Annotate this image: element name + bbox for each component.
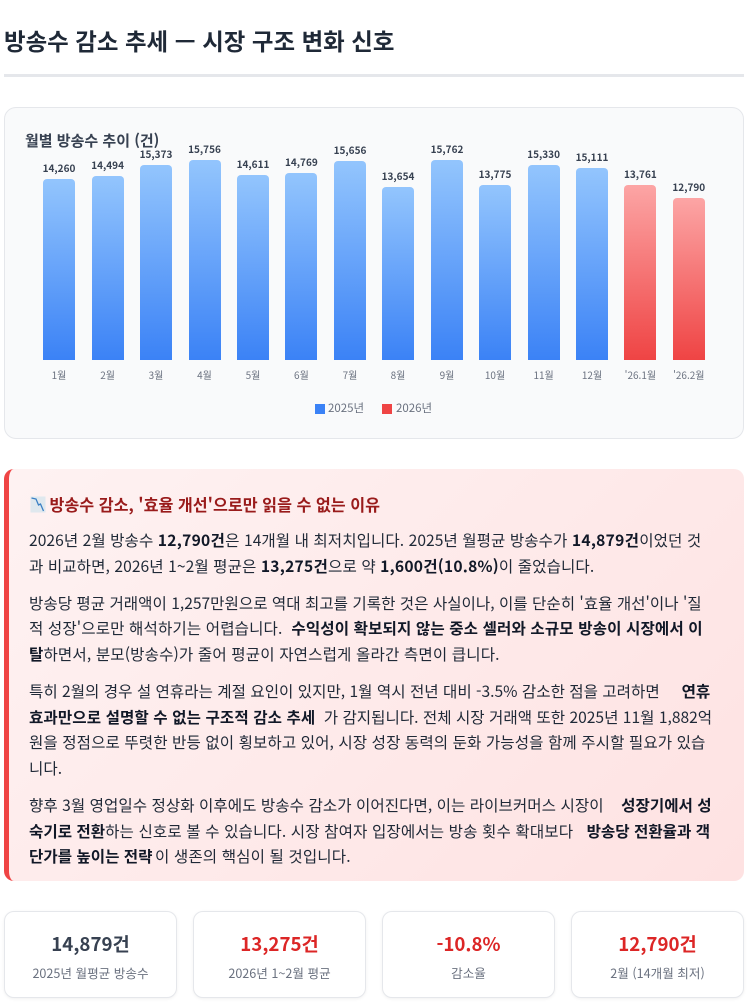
bar chart: 12월 [582,367,602,382]
stat card: 2025 monthly average [4,911,177,998]
bar chart: 15,762 [431,141,463,156]
bar chart: 10월 [485,367,505,382]
callout body text: 방송당 평균 거래액이 1,257만원으로 역대 최고를 기록한 것은 사실이나, 이를 단순히 '효율 개선'이나 '질 [29,592,702,614]
panel: monthly chart [4,107,744,439]
bar chart: 9월 [440,367,454,382]
bar chart: 15,656 [334,142,366,157]
stat card: 2026 Jan-Feb average: 13,275건 [240,930,319,957]
bar chart: 14,769 [285,154,318,169]
panel: analysis callout [4,469,744,881]
bar chart: 15,111 [576,149,608,164]
chart legend: 2025년 [328,400,364,416]
bar chart: 14,611 [237,156,269,171]
stat card: February low [571,911,744,998]
callout heading: 방송수 감소, '효율 개선'으로만 읽을 수 없는 이유 [50,492,380,516]
icon: chart decreasing [30,496,46,512]
callout body text: 효과만으로 설명할 수 없는 구조적 감소 추세 가 감지됩니다. 전체 시장 거래액 또한 2025년 11월 1,882억 [29,706,712,728]
callout body text: 단가를 높이는 전략 이 생존의 핵심이 될 것입니다. [29,845,351,867]
bar chart: 12,790 [672,179,705,194]
callout body text: 원을 정점으로 뚜렷한 반등 없이 횡보하고 있어, 시장 성장 동력의 둔화 가능성을 함께 주시할 필요가 있습 [29,731,705,753]
bar chart: 6월 [294,367,309,382]
bar chart: 13,775 [479,166,511,181]
bar chart: 15,373 [140,146,172,161]
callout body text: 향후 3월 영업일수 정상화 이후에도 방송수 감소가 이어진다면, 이는 라이브커머스 시장이 성장기에서 성 [29,794,712,816]
title rule [4,74,744,77]
bar chart: 15,756 [188,141,221,156]
bar chart: 14,494 [91,157,124,172]
callout body text: 숙기로 전환하는 신호로 볼 수 있습니다. 시장 참여자 입장에서는 방송 횟수 확대보다 방송당 전환율과 객 [29,820,710,842]
chart heading: 월별 방송수 추이 (건) [25,130,159,151]
callout body text [29,529,712,867]
bar chart: 1월 [52,367,66,382]
chart legend [315,400,432,416]
callout body text: 니다. [29,756,62,778]
bar chart: '26.2월 [673,367,705,382]
bar chart: 14,260 [43,160,75,175]
callout body text: 2026년 2월 방송수 12,790건은 14개월 내 최저치입니다. 2025년 월평균 방송수가 14,879건이었던 것 [29,529,701,551]
bar chart: 5월 [246,367,260,382]
bar chart: 2월 [100,367,115,382]
callout body text: 적 성장'으로만 해석하기는 어렵습니다. 수익성이 확보되지 않는 중소 셀러와 소규모 방송이 시장에서 이 [29,617,703,639]
title: 방송수 감소 추세 — 시장 구조 변화 신호 [4,23,394,57]
callout body text: 특히 2월의 경우 설 연휴라는 계절 요인이 있지만, 1월 역시 전년 대비 -3.5% 감소한 점을 고려하면 연휴 [29,680,710,702]
stat card: 2026 Jan-Feb average [193,911,366,998]
bar chart: 15,330 [527,146,560,161]
bar chart: 11월 [533,367,554,382]
bar chart [43,141,705,382]
stat card: decrease rate: -10.8% [436,930,501,957]
bar chart: 7월 [343,367,357,382]
bar chart: 13,654 [382,168,414,183]
stat card: February low: 2월 (14개월 최저) [610,963,705,982]
stat card: decrease rate: 감소율 [451,963,486,982]
bar chart: 3월 [149,367,163,382]
stat card: 2026 Jan-Feb average: 2026년 1~2월 평균 [228,963,331,982]
bar chart: 13,761 [624,166,657,181]
stat card: February low: 12,790건 [618,930,697,957]
bar chart: '26.1월 [625,367,656,382]
stat card: 2025 monthly average: 14,879건 [51,930,130,957]
stat card: decrease rate [382,911,555,998]
bar chart: 4월 [197,367,212,382]
chart legend: 2026년 [396,400,432,416]
bar chart: 8월 [391,367,405,382]
stat card: 2025 monthly average: 2025년 월평균 방송수 [32,963,149,982]
callout body text: 탈하면서, 분모(방송수)가 줄어 평균이 자연스럽게 올라간 측면이 큽니다. [29,642,500,664]
callout body text: 과 비교하면, 2026년 1~2월 평균은 13,275건으로 약 1,600건(10.8%)이 줄었습니다. [29,554,594,576]
